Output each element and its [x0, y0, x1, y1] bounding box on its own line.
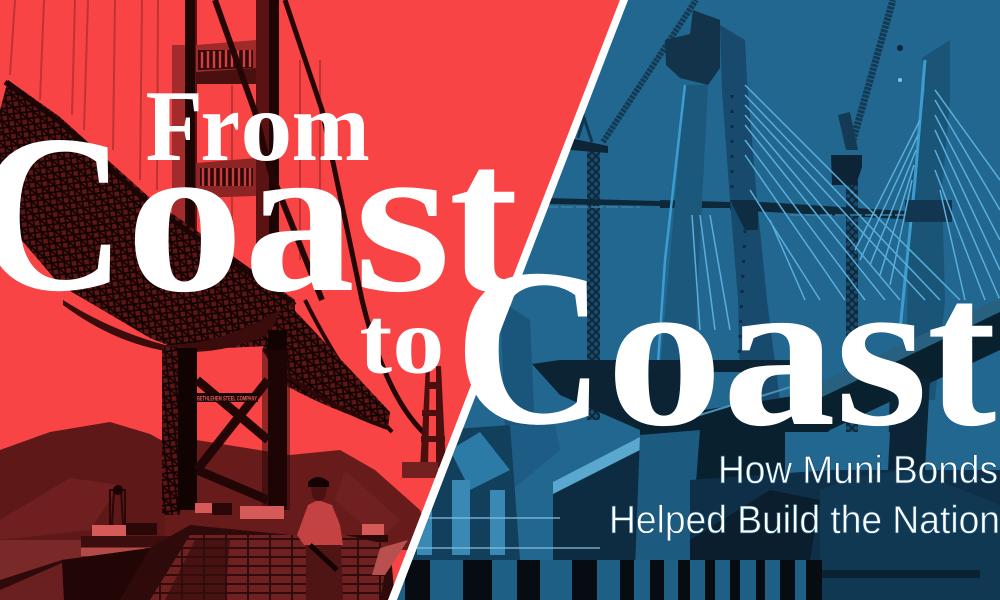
title word: second Coast: t: [927, 233, 996, 471]
panel: red historic bridge photo: [0, 0, 640, 600]
pier and deck foreground: [0, 525, 408, 600]
horizontal work beam: [548, 198, 905, 220]
title word: From: r: [200, 72, 240, 182]
upper decks: [532, 298, 1000, 490]
site huts and water tower: [81, 485, 388, 556]
title word: to: o: [392, 289, 444, 394]
mountains: [0, 422, 435, 580]
title word: first Coast: o: [126, 97, 243, 338]
sign: steel company: [195, 393, 258, 402]
striped barrier: [380, 560, 822, 600]
steel truss roadway: [0, 80, 390, 428]
title: From Coast to Coast: [0, 71, 996, 472]
pylon B: [720, 25, 780, 401]
crane right: [831, 0, 903, 440]
title word: From: F: [146, 71, 203, 183]
distant tower: [402, 366, 446, 478]
title word: second Coast: [455, 222, 996, 472]
title word: From: [146, 71, 370, 183]
crane left: [570, 0, 696, 420]
main cables: [215, 0, 424, 433]
lower approach bridges: [400, 425, 1000, 600]
title word: to: t: [360, 288, 392, 393]
title word: From: m: [292, 71, 370, 182]
title word: to: [360, 288, 444, 394]
pylon A: [657, 10, 720, 360]
stay cables: [692, 85, 1000, 330]
title word: first Coast: t: [449, 99, 518, 337]
title word: second Coast: o: [606, 232, 723, 471]
subtitle: [609, 449, 1000, 542]
title word: second Coast: C: [455, 222, 605, 472]
title word: first Coast: [0, 89, 518, 338]
title word: second Coast: s: [835, 233, 928, 471]
pylon C: [900, 40, 952, 400]
title word: second Coast: a: [722, 232, 836, 471]
panel: blue modern bridge photo: [380, 0, 1000, 600]
title word: From: o: [240, 72, 292, 183]
pier blocks: [501, 306, 890, 474]
vertical suspender cables: [9, 0, 321, 260]
title word: first Coast: s: [354, 95, 451, 338]
lower tower with cross bracing: [162, 330, 290, 515]
tower top section: [172, 0, 279, 244]
diagonal white divider: [388, 0, 628, 600]
title word: first Coast: a: [244, 96, 355, 338]
worker figure: [297, 477, 343, 600]
lower tower with cross bracing: BETHLEHEM STEEL COMPANY: [197, 396, 257, 402]
